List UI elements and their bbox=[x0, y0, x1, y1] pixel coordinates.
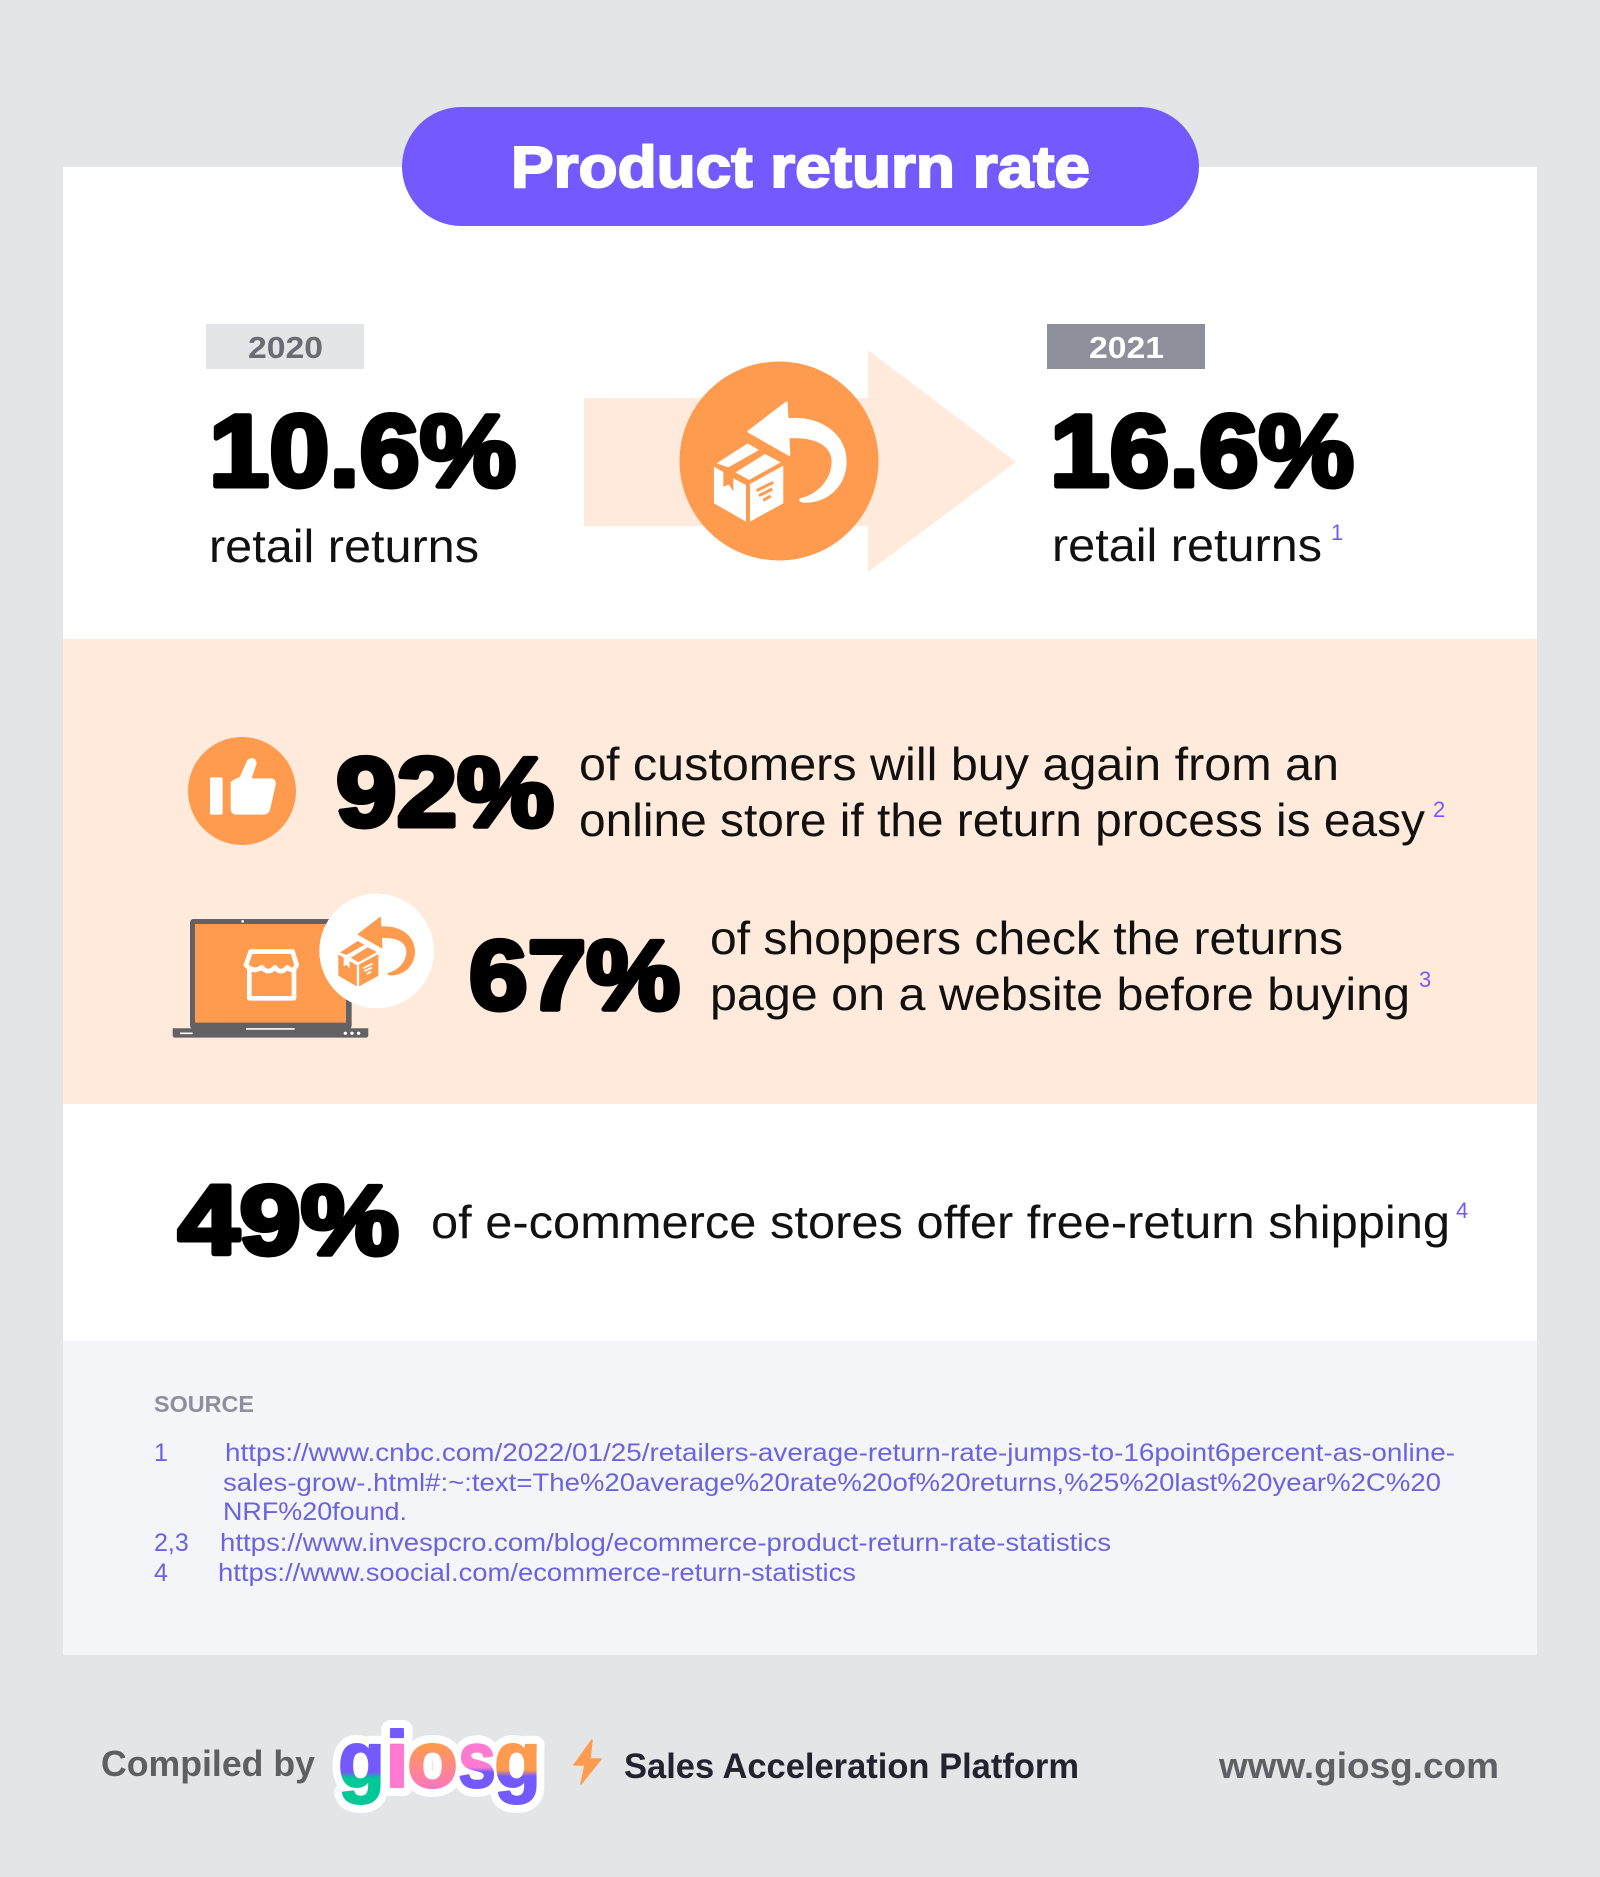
footnote 2: 2 bbox=[1433, 797, 1445, 822]
text: buy again bbox=[579, 738, 1425, 846]
giosg logo bbox=[338, 1715, 541, 1804]
website: www.giosg.com bbox=[1218, 1745, 1499, 1786]
title pill: Product return rate bbox=[511, 135, 1090, 200]
giosg logo: i bbox=[385, 1715, 409, 1804]
year tag 2020 bbox=[206, 324, 364, 369]
panel: customer behaviour bbox=[63, 639, 1537, 1104]
panel: free-return shipping bbox=[63, 1104, 1537, 1341]
year tag 2020: 2020 bbox=[248, 330, 323, 365]
source list: 1 bbox=[154, 1439, 168, 1467]
arrow from 2020 to 2021 bbox=[584, 350, 1016, 572]
text: free-return shipping: of e-commerce stores offer free-return shipping bbox=[431, 1196, 1450, 1248]
stat 92%: 92% bbox=[336, 737, 554, 847]
giosg logo: o bbox=[407, 1715, 458, 1804]
footer bbox=[101, 1715, 1499, 1804]
icon: thumbs up bbox=[188, 737, 296, 845]
label retail returns 2020: retail returns bbox=[209, 520, 479, 572]
title pill bbox=[402, 107, 1199, 226]
year tag 2021: 2021 bbox=[1089, 330, 1164, 365]
source heading: SOURCE bbox=[154, 1391, 254, 1417]
source list: 2,3 bbox=[154, 1529, 189, 1557]
text: buy again: of customers will buy again from an bbox=[579, 738, 1339, 790]
icon: laptop with store and returned parcel bbox=[173, 894, 434, 1038]
compiled by text: Compiled by bbox=[101, 1743, 315, 1784]
stat 16.6%: 16.6% bbox=[1050, 394, 1354, 508]
panel: sources bbox=[63, 1341, 1537, 1655]
source list: https://www.soocial.com/ecommerce-return-statistics bbox=[218, 1559, 856, 1587]
year tag 2021 bbox=[1047, 324, 1205, 369]
source list bbox=[154, 1439, 1455, 1587]
giosg logo: s bbox=[458, 1715, 496, 1804]
giosg logo: g bbox=[338, 1715, 385, 1804]
stat 10.6%: 10.6% bbox=[209, 394, 516, 508]
tagline: Sales Acceleration Platform bbox=[624, 1747, 1079, 1786]
label retail returns 2021: retail returns bbox=[1052, 519, 1322, 571]
footnote 3: 3 bbox=[1419, 967, 1431, 992]
footnote 1: 1 bbox=[1331, 520, 1343, 545]
icon: returned parcel in orange circle bbox=[680, 362, 878, 560]
footnote 4: 4 bbox=[1456, 1198, 1468, 1223]
giosg logo: s bbox=[458, 1715, 496, 1804]
stat 67%: 67% bbox=[469, 920, 680, 1030]
text: returns page bbox=[710, 912, 1410, 1020]
text: returns page: page on a website before buying bbox=[710, 968, 1410, 1020]
giosg logo: g bbox=[494, 1715, 541, 1804]
text: buy again: online store if the return process is easy bbox=[579, 794, 1425, 846]
source list: https://www.invespcro.com/blog/ecommerce-product-return-rate-statistics bbox=[220, 1529, 1111, 1557]
stat 49%: 49% bbox=[178, 1165, 399, 1275]
giosg logo: o bbox=[407, 1715, 458, 1804]
giosg logo: g bbox=[494, 1715, 541, 1804]
icon: lightning bolt bbox=[574, 1740, 601, 1784]
panel: retail returns comparison bbox=[63, 167, 1537, 639]
text: returns page: of shoppers check the returns bbox=[710, 912, 1343, 964]
source list: NRF%20found. bbox=[223, 1498, 407, 1526]
giosg logo: g bbox=[338, 1715, 385, 1804]
source list: 4 bbox=[154, 1559, 168, 1587]
giosg logo: i bbox=[385, 1715, 409, 1804]
source list: https://www.cnbc.com/2022/01/25/retailers-average-return-rate-jumps-to-16point6percent-as-online- bbox=[225, 1439, 1455, 1467]
source list: sales-grow-.html#:~:text=The%20average%20rate%20of%20returns,%25%20last%20year%2C%20 bbox=[223, 1469, 1441, 1497]
